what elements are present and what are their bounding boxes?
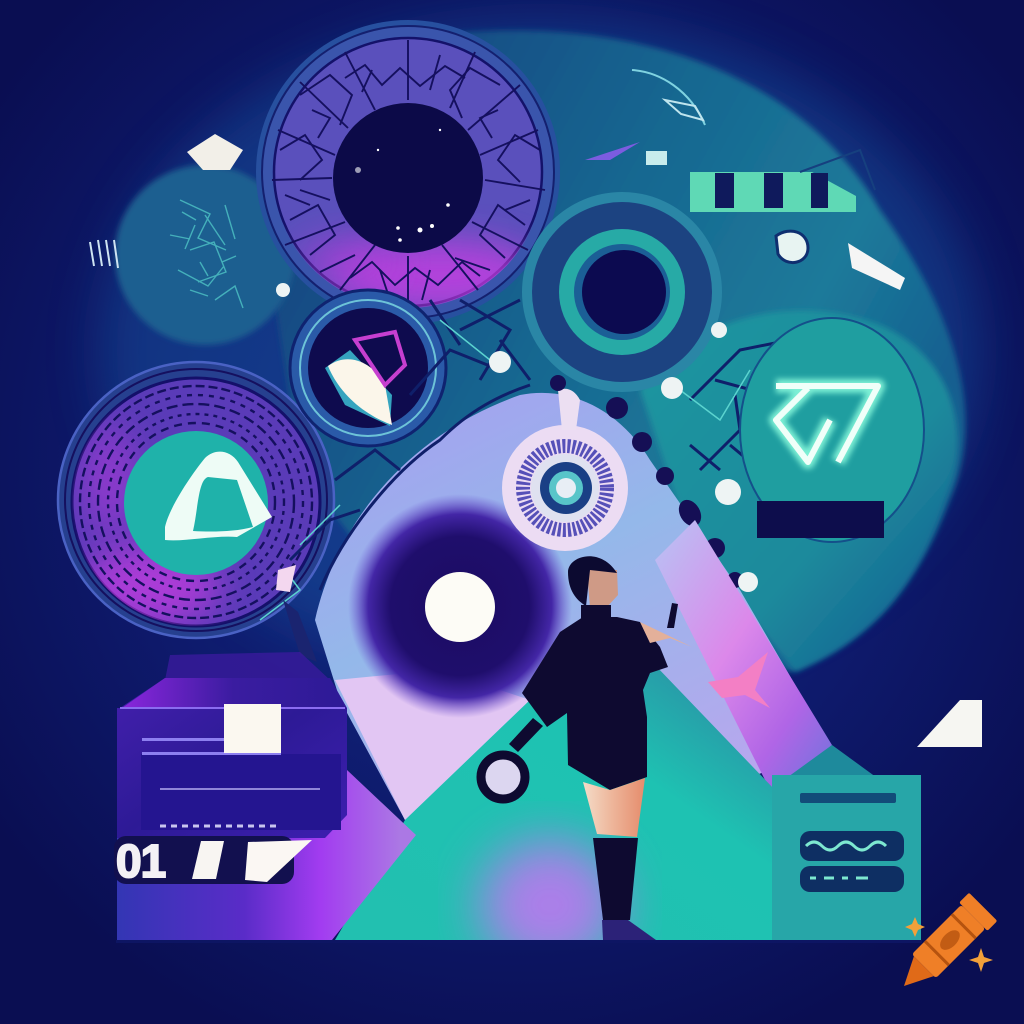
small white fragments top bbox=[90, 70, 905, 290]
figure: person bbox=[481, 556, 692, 940]
panel: diagonal ribbon bbox=[655, 520, 832, 790]
clapper strip with numerals bbox=[114, 835, 312, 887]
clapper strip with numerals: 01 bbox=[116, 835, 166, 887]
icon: central black disc with white dot bbox=[348, 494, 572, 718]
icon: large textured purple eye bbox=[256, 20, 560, 324]
panel: right teal lobe bbox=[640, 311, 957, 672]
panel: pale central shape bbox=[315, 393, 830, 820]
panel: teal floor bbox=[335, 665, 775, 940]
icon: small circular badge bbox=[290, 290, 446, 446]
panel: right teal box bbox=[772, 775, 921, 942]
dotted arc of dark dots bbox=[550, 375, 743, 588]
icon: left textured wheel bbox=[58, 362, 334, 638]
icon: striped banner bbox=[690, 150, 875, 212]
bottom edge line bbox=[116, 940, 922, 943]
panel: left muted circle bbox=[115, 165, 295, 345]
panel: left textured patch bbox=[170, 200, 243, 308]
panel: teal point behind right box bbox=[772, 745, 880, 780]
dark spike and pale bits bbox=[165, 565, 330, 680]
small white nodes bbox=[276, 283, 758, 592]
panel: violet glow on floor bbox=[480, 840, 620, 970]
panel: purple left floor bbox=[117, 770, 416, 940]
backdrop glow bbox=[100, 20, 980, 680]
icon: crayon logo bbox=[890, 893, 997, 1000]
icon: glowing bulb panel bbox=[740, 318, 924, 542]
vein network bbox=[290, 300, 790, 590]
icon: concentric target bbox=[522, 192, 722, 392]
icon: small eye medallion bbox=[502, 389, 628, 551]
panel: large teal backdrop shape bbox=[260, 31, 965, 672]
white corner fragment bbox=[917, 700, 982, 747]
pink figure on ribbon bbox=[708, 652, 770, 708]
panel: dark film box bbox=[117, 678, 347, 838]
panel: pink wedge under disc bbox=[335, 670, 530, 820]
